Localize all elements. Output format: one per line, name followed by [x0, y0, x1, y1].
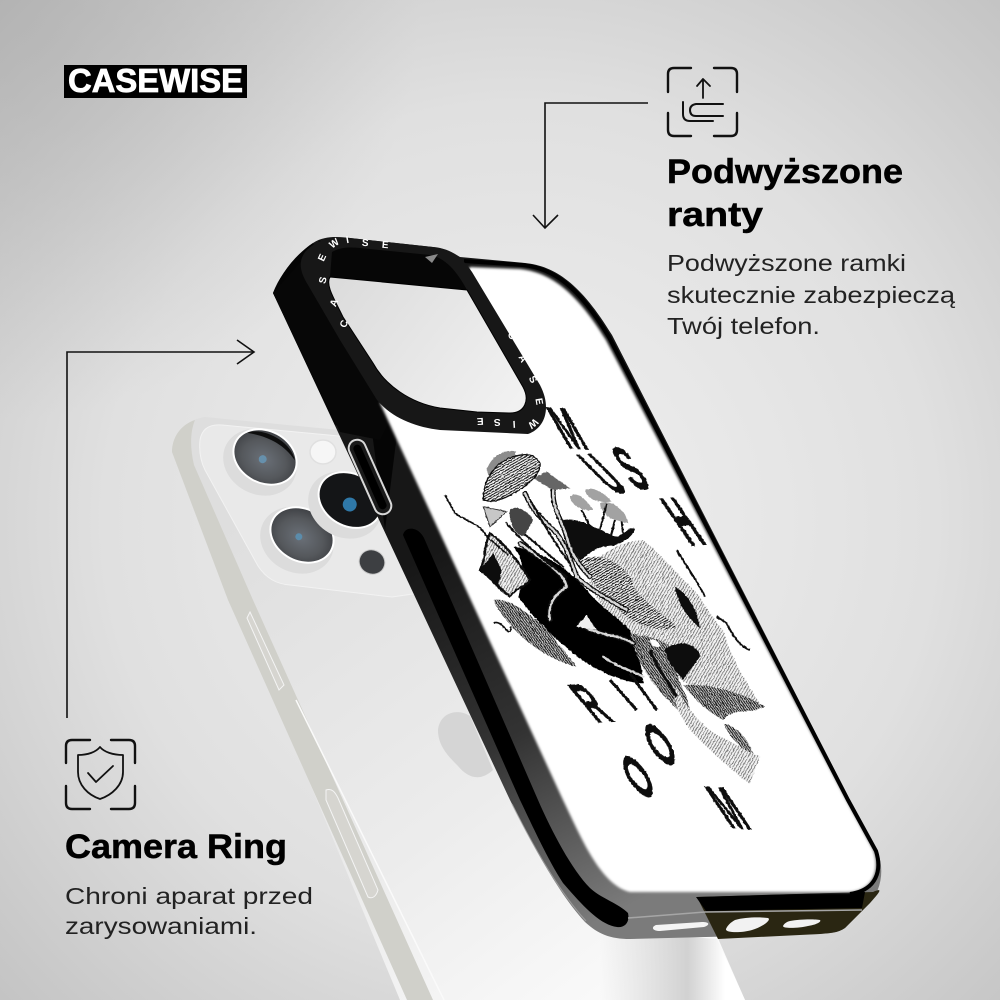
- flash: [310, 440, 336, 464]
- text block: raised edges description: [667, 250, 955, 339]
- phone side buttons: [247, 612, 378, 898]
- bottom gloss line: [628, 910, 862, 918]
- lower dark slashes: [610, 650, 677, 710]
- arrow: left pointing to camera ring: [67, 340, 254, 718]
- lens top left: [211, 414, 309, 508]
- port: speaker right: [783, 919, 820, 928]
- large mushroom cap: [483, 455, 540, 501]
- nose triangle: [577, 615, 597, 630]
- icon: raised edges upload: [668, 68, 737, 136]
- artwork lettering: O: [616, 741, 661, 814]
- heading: camera ring: Camera Ring: [65, 828, 287, 866]
- sensor: [355, 546, 389, 578]
- case body silhouette: [273, 237, 881, 939]
- text block: camera ring description: Chroni aparat przed: [65, 883, 313, 909]
- ring engraved logo: C: [338, 319, 351, 329]
- artwork lettering: U: [563, 443, 643, 506]
- camera plateau: [200, 425, 440, 597]
- mid shaded muzzle: [630, 633, 693, 723]
- artwork lettering: S: [600, 436, 662, 502]
- artwork lettering: M: [694, 773, 762, 843]
- phone side band: [172, 420, 433, 1000]
- small cap spotted: [533, 472, 570, 490]
- mushroom crown speckle: [487, 451, 517, 478]
- eye socket right: [675, 587, 700, 628]
- text block: raised edges description: Podwyższone ramki: [667, 250, 906, 276]
- stem light cores: [520, 490, 643, 677]
- ring engraved logo: [316, 235, 545, 431]
- artwork lettering: [537, 396, 762, 843]
- skull and mushroom artwork: [445, 396, 765, 843]
- ring inner wall: [330, 247, 467, 290]
- brow light: [630, 563, 672, 622]
- side gloss line: [512, 804, 586, 921]
- camera ring: [301, 235, 546, 434]
- ring engraved logo: E: [381, 240, 389, 251]
- artwork lettering: O: [638, 709, 683, 782]
- side button: [346, 437, 394, 517]
- ring engraved logo: S: [361, 238, 369, 249]
- ring engraved logo: S: [526, 374, 539, 386]
- teeth row: [683, 685, 765, 753]
- artwork lettering: H: [648, 483, 718, 560]
- left bone mass: [480, 533, 530, 597]
- white stems outlined: [507, 490, 643, 677]
- ring outer: [301, 237, 546, 434]
- lens right: [296, 457, 395, 552]
- black phone case: [273, 237, 881, 939]
- heading: raised edges: ranty: [667, 196, 763, 234]
- ring engraved logo: S: [317, 275, 330, 285]
- arrow: top pointing to raised edges: [533, 103, 648, 228]
- apple logo: [438, 712, 493, 777]
- lower hatched bone strip: [493, 600, 577, 667]
- heading: raised edges: Podwyższone: [667, 153, 903, 191]
- small cap middle: [510, 508, 533, 537]
- text block: camera ring description: zarysowaniami.: [65, 913, 257, 939]
- bottom black band: [696, 892, 865, 911]
- text block: raised edges description: skutecznie zabezpieczą: [667, 282, 955, 308]
- white phone behind the case: [172, 414, 745, 1000]
- thin stems: [507, 500, 570, 577]
- ring engraved logo: I: [345, 235, 350, 246]
- heading: raised edges: [667, 153, 903, 234]
- brand logo: CASEWISE: [68, 62, 243, 99]
- ring engraved logo: C: [505, 330, 518, 342]
- cheek hatching: [673, 627, 750, 693]
- artwork lettering: M: [537, 396, 598, 463]
- brow ridge shading: [580, 557, 677, 629]
- right vine: [677, 550, 750, 650]
- small cap left: [483, 507, 507, 527]
- phone edge highlight: [296, 700, 444, 1000]
- camera window: [329, 277, 526, 413]
- teeth spot: [650, 640, 660, 647]
- port: speaker left: [653, 922, 708, 931]
- curl: [493, 622, 511, 632]
- text block: camera ring description: [65, 883, 313, 939]
- ring engraved logo: E: [316, 252, 329, 263]
- grey caps cluster: [570, 489, 628, 523]
- left vine: [445, 495, 508, 555]
- right black rim line: [464, 261, 878, 894]
- ring engraved logo: A: [516, 353, 529, 365]
- grey cap stems: [582, 503, 623, 540]
- lower jaw strip: [674, 687, 760, 783]
- artwork lettering: R: [557, 674, 626, 735]
- ring engraved logo: E: [532, 397, 545, 406]
- black stripe along side: [403, 529, 628, 927]
- icon: shield with check: [66, 740, 135, 809]
- ring engraved logo: S: [493, 416, 501, 427]
- lens bottom: [248, 492, 346, 586]
- phone back body: [172, 417, 745, 1000]
- white back panel: [380, 267, 876, 892]
- wall highlight: [425, 254, 438, 263]
- upper dark side: [273, 243, 400, 530]
- ring engraved logo: I: [512, 418, 516, 429]
- ring engraved logo: E: [476, 415, 484, 426]
- left bone dark edge: [480, 553, 505, 595]
- wedge under case: [600, 930, 745, 1000]
- ring engraved logo: W: [525, 416, 540, 431]
- bottom dark lip: [697, 890, 879, 939]
- stem dark outlines: [520, 490, 633, 643]
- skull dome: [587, 540, 760, 705]
- text block: raised edges description: Twój telefon.: [667, 313, 820, 339]
- ring engraved logo: W: [328, 236, 342, 251]
- nasal shadow: [665, 644, 700, 680]
- ring engraved logo: A: [328, 298, 341, 308]
- large dark cavity: [513, 547, 643, 683]
- top black edge above phone: [273, 240, 400, 440]
- port: usb-c: [726, 917, 769, 932]
- dark upper mass: [563, 519, 635, 560]
